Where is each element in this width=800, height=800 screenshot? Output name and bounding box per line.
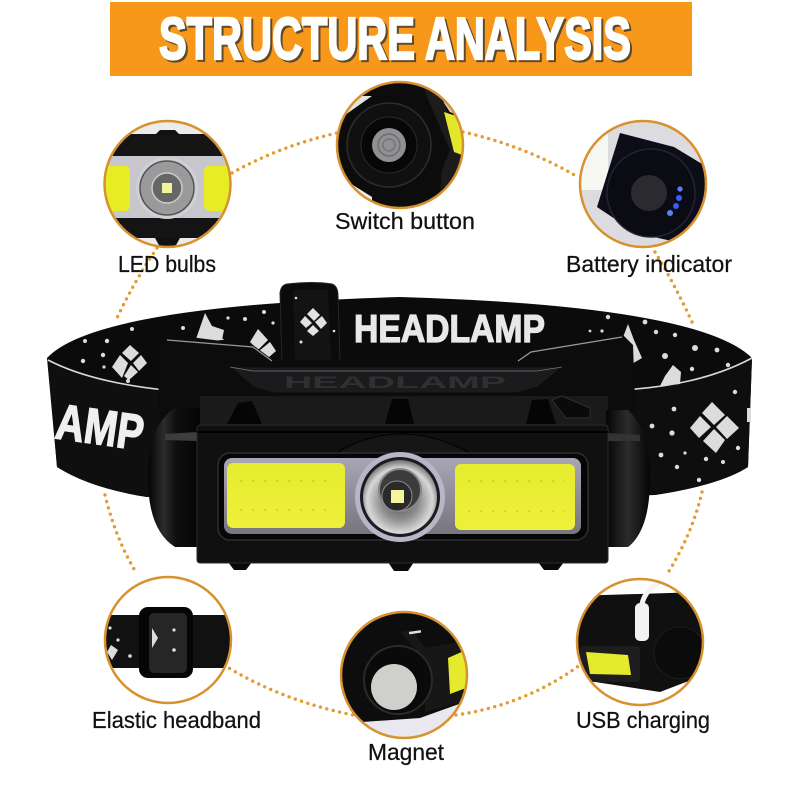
bottom bumps bbox=[228, 562, 564, 571]
strap pattern: diamonds and dots bbox=[81, 310, 751, 482]
top ridges bbox=[227, 399, 556, 424]
label: magnet: Magnet bbox=[368, 739, 445, 765]
strap text: HEADLAMP: HEADLAMP bbox=[354, 308, 545, 351]
label: LED bulbs: LED bulbs bbox=[118, 251, 216, 277]
right side cylinder bbox=[606, 410, 650, 547]
strap text: AMP: AMP bbox=[52, 393, 147, 461]
embossed bracket text: HEADLAMP bbox=[284, 373, 506, 392]
detail: battery indicator bbox=[578, 118, 712, 250]
detail: USB charging bbox=[576, 578, 704, 706]
right COB light panel bbox=[455, 464, 575, 530]
lamp neck band bbox=[200, 396, 608, 426]
headlamp body bbox=[148, 335, 650, 571]
label: USB charging: USB charging bbox=[576, 707, 710, 733]
elastic head strap bbox=[47, 297, 752, 497]
mounting bracket bbox=[157, 335, 636, 430]
detail: LED bulbs bbox=[103, 120, 232, 248]
COB chip dots bbox=[240, 481, 565, 511]
left side cylinder bbox=[148, 408, 200, 547]
side sliding button bbox=[552, 396, 590, 418]
label: switch button: Switch button bbox=[335, 208, 475, 234]
detail: magnet bbox=[338, 608, 470, 745]
dotted connector ring bbox=[105, 132, 702, 715]
center spot lens bbox=[355, 452, 445, 542]
strap buckle bbox=[280, 282, 340, 362]
label: elastic headband: Elastic headband bbox=[92, 707, 261, 733]
detail: elastic headband bbox=[100, 572, 235, 707]
detail: switch button bbox=[335, 80, 470, 212]
left COB light panel bbox=[227, 463, 345, 528]
lens bezel bbox=[218, 453, 588, 540]
label: battery indicator: Battery indicator bbox=[566, 251, 732, 277]
front panel bbox=[197, 425, 608, 563]
